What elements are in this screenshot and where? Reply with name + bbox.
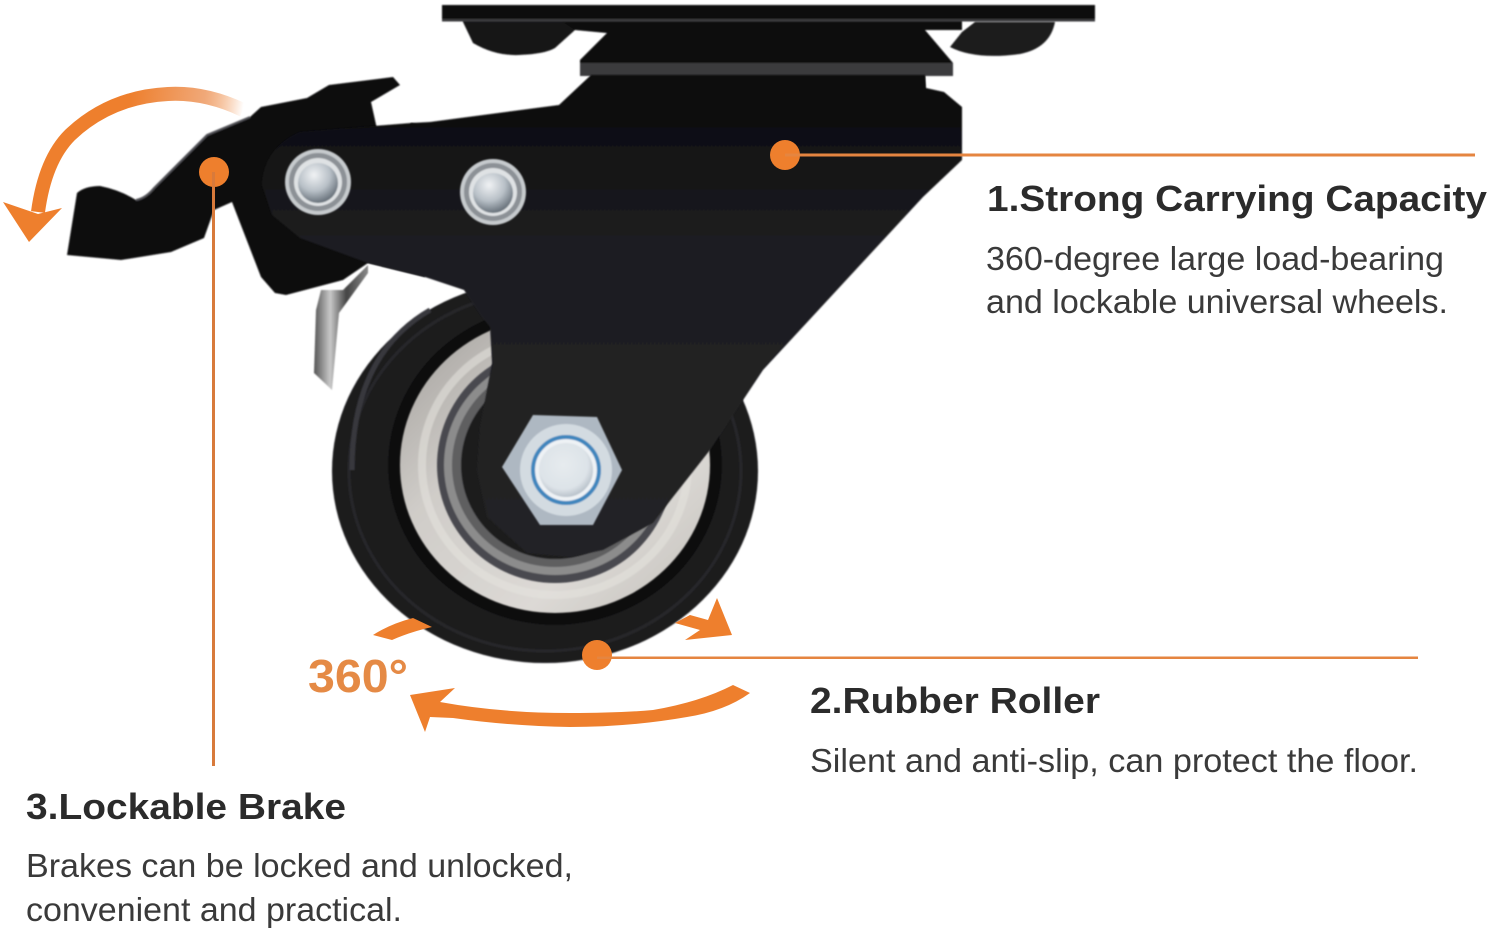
callout line: brake bbox=[199, 157, 229, 766]
brake lever bbox=[67, 77, 440, 295]
arrow: right swivel bbox=[675, 598, 732, 640]
bearing bbox=[437, 347, 673, 583]
heading: feature 1: 1.Strong Carrying Capacity bbox=[987, 178, 1487, 219]
text block: feature 3 bbox=[26, 786, 573, 928]
description: feature 2: Silent and anti-slip, can protect the floor. bbox=[810, 742, 1418, 779]
arrow: left swivel bbox=[373, 618, 432, 640]
text block: feature 1 bbox=[986, 178, 1487, 320]
rivet 1 bbox=[285, 149, 351, 215]
heading: feature 2: 2.Rubber Roller bbox=[810, 680, 1100, 721]
mounting plate with feet and swivel neck bbox=[442, 5, 1095, 90]
wheel bbox=[332, 279, 758, 663]
silver hub ring bbox=[400, 317, 710, 613]
heading: feature 3: 3.Lockable Brake bbox=[26, 786, 346, 827]
description: feature 3: Brakes can be locked and unlocked, bbox=[26, 847, 573, 884]
arrow: lower swivel bbox=[410, 685, 750, 732]
label: 360 degrees: 360° bbox=[308, 650, 408, 702]
arrow: brake rotation bbox=[3, 94, 243, 242]
caster wheel product illustration bbox=[67, 5, 1095, 663]
text block: feature 2 bbox=[810, 680, 1418, 779]
callout line: roller bbox=[582, 640, 1418, 670]
rubber tyre bbox=[332, 279, 758, 663]
description: feature 1: and lockable universal wheels. bbox=[986, 283, 1448, 320]
brake metal tab bbox=[314, 265, 368, 390]
swivel bracket bbox=[262, 75, 962, 557]
description: feature 1: 360-degree large load-bearing bbox=[986, 240, 1444, 277]
description: feature 1 bbox=[986, 240, 1448, 320]
rivet 2 bbox=[460, 159, 526, 225]
description: feature 3 bbox=[26, 847, 573, 928]
axle nut bbox=[502, 415, 622, 525]
callout line: capacity bbox=[770, 140, 1475, 170]
description: feature 3: convenient and practical. bbox=[26, 891, 402, 928]
